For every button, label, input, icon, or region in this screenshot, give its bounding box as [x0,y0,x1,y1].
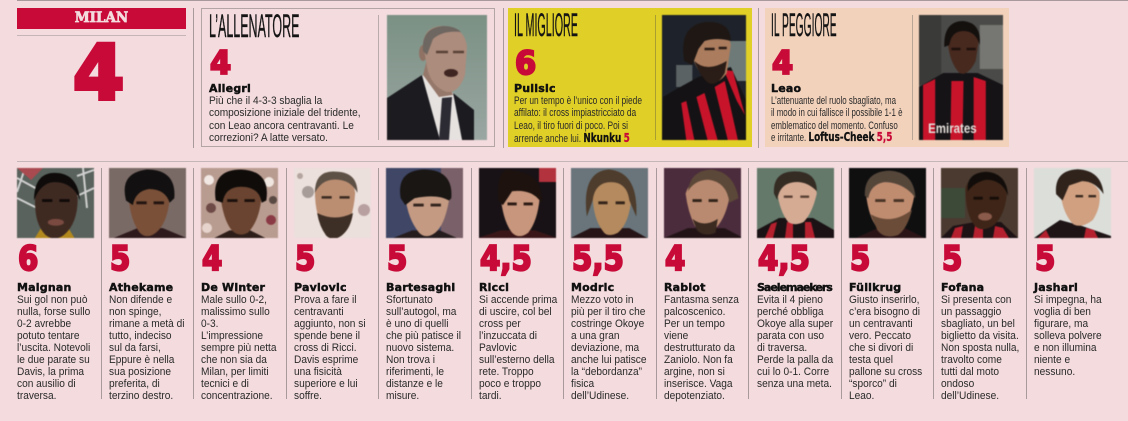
comment: soffre. [294,390,322,402]
comment: cross per [479,318,521,330]
comment: malissimo sullo [201,306,270,318]
comment: Fantasma senza [664,294,739,306]
comment: potuto tentare [17,330,80,342]
comment: sull’autogol, ma [386,306,456,318]
comment: Perde la palla da [757,354,833,366]
comment: vero. Peccato [849,330,911,342]
name: Maignan [17,281,72,294]
heading: L’ALLENATORE [209,8,299,44]
comment: depotenziato. [664,390,725,402]
worst player comment: il modo in cui fallisce il possibile 1-1 è [771,107,903,119]
coach comment: Più che il 4-3-3 sbaglia la [209,95,322,107]
comment: cross di Ricci. [294,342,357,354]
comment: costringe Okoye [571,318,644,330]
player card: Maignan [16,167,95,402]
rating: 5 [295,239,315,279]
comment: e non illumina [1034,342,1097,354]
worst player rating: 4 [772,44,793,82]
rating: 4,5 [480,239,532,279]
comment: voglia di ben [1034,306,1091,318]
comment: di uscire, col bel [479,306,552,318]
name: Ricci [479,281,509,294]
best player comment: affilato: il cross impiastricciato da [514,107,636,119]
photo: Bartesaghi [385,167,464,239]
comment: destrutturato da [664,342,735,354]
name: Bartesaghi [386,281,455,294]
comment: non spinge, [109,306,161,318]
player card: Jashari [1034,168,1111,400]
comment: dell’Udinese. [571,390,629,402]
comment: nessuno. [1034,366,1075,378]
comment: Non sposta nulla, [941,342,1019,354]
comment: perché obbliga [757,306,824,318]
coach comment: correzioni? A latte versato. [209,132,328,144]
photo: Füllkrug [848,167,927,239]
rating: 4,5 [758,239,810,279]
rating: 5 [1035,239,1055,279]
photo: Ricci [478,167,557,239]
best player name: Pulisic [514,82,556,95]
photo: Allegri [386,14,488,141]
comment [109,294,185,402]
player card: Athekame [108,167,187,402]
comment [757,294,834,390]
team name banner: MILAN [75,10,128,26]
coach comment: composizione iniziale del tridente, [209,107,361,119]
comment: inserisce. Vaga [664,378,733,390]
comment: palcoscenico. [664,306,725,318]
comment: anche lui patisce [571,354,647,366]
comment: Mezzo voto in [571,294,634,306]
comment: sull’esterno della [479,354,555,366]
comment: senza una meta. [757,378,832,390]
comment: Si presenta con [941,294,1011,306]
comment: L’impressione [201,330,263,342]
photo: De Winter [200,168,278,239]
comment: l’uscita. Notevoli [17,342,90,354]
rating: 5 [850,239,870,279]
rating: 5 [110,239,130,279]
heading: IL PEGGIORE [771,7,837,43]
heading: IL MIGLIORE [514,7,578,43]
comment [1034,294,1102,378]
comment: l’inzuccata di [479,330,537,342]
comment: deviazione, ma [571,342,639,354]
name: Athekame [109,281,173,294]
comment: un centravanti [849,318,913,330]
comment: che più patisce il [386,330,461,342]
comment: “sporco” di [849,378,897,390]
comment: distanze e le [386,378,443,390]
worst player comment: L’attenuante del ruolo sbagliato, ma [771,95,896,107]
comment: superiore e lui [294,378,358,390]
comment: un passaggio [941,306,1001,318]
comment: più per il tiro che [571,306,645,318]
comment: figurare, ma [1034,318,1088,330]
comment: argine, non si [664,366,725,378]
worst player comment: emblematico del momento. Confuso [771,120,898,132]
rating: 5,5 [572,239,624,279]
player card: De Winter [200,168,278,402]
name: Rabiot [664,281,706,294]
photo: Fofana [940,167,1019,239]
photo: Athekame [108,167,187,239]
comment: Davis esprime [294,354,358,366]
coach comment [209,95,361,144]
comment: tecnici e di [201,378,249,390]
comment: viene [664,330,688,342]
photo: Pulisic [661,14,747,141]
comment: poco e troppo [479,378,541,390]
comment: Davis, la prima [17,366,84,378]
photo: Jashari [1034,168,1111,238]
comment: Sfortunato [386,294,433,306]
comment: Zaniolo. Non fa [664,354,733,366]
comment: Non difende e [109,294,172,306]
player card: Pavlovic [294,170,371,402]
comment: solleva polvere [1034,330,1102,342]
photo: Leao [918,14,1004,141]
comment: aggiunto, non si [294,318,366,330]
comment [294,294,366,402]
comment: la “debordanza” [571,366,642,378]
name: Saelemaekers [757,281,832,294]
player card: Bartesaghi [385,167,464,402]
comment: niente e [1034,354,1070,366]
comment: Male sullo 0-2, [201,294,267,306]
comment: Per un tempo [664,318,725,330]
comment: che non sia da [201,354,267,366]
worst player comment: e irritante. Loftus-Cheek 5,5 [771,130,892,145]
comment [17,294,90,402]
name: Jashari [1034,281,1078,294]
comment: Si accende prima [479,294,557,306]
comment: c’era bisogno di [849,306,920,318]
player card: Rabiot [663,167,742,402]
team score: 4 [73,28,124,117]
comment: dell’Udinese. [941,390,999,402]
comment [201,294,277,402]
rating: 6 [18,239,38,279]
comment: terzino destro. [109,390,173,402]
player card: Ricci [478,167,558,402]
comment: Non trova i [386,354,435,366]
comment: nulla, forse sullo [17,306,90,318]
comment: testa quel [849,354,893,366]
comment: Eppure è nella [109,354,174,366]
player card: Modric [570,167,649,402]
photo: Saelemaekers [756,167,835,239]
comment: 0-2 avrebbe [17,318,71,330]
comment [941,294,1019,402]
comment: tardi. [479,390,502,402]
comment [849,294,922,402]
header: Milan team score [17,8,186,117]
name: De Winter [201,281,265,294]
player card: Füllkrug [848,167,927,402]
comment: Sui gol non può [17,294,87,306]
comment: Leao. [849,390,874,402]
team name banner [17,8,186,29]
comment: è uno di quelli [386,318,449,330]
comment: Milan, per limiti [201,366,269,378]
comment: una fisicità [294,366,342,378]
comment: Giusto inserirlo, [849,294,919,306]
comment: le due parate su [17,354,90,366]
comment: con ausilio di [17,378,76,390]
rating: 4 [202,239,222,279]
comment: Okoye alla super [757,318,833,330]
name: Fofana [941,281,984,294]
comment: 0-3. [201,318,218,330]
comment: ondoso [941,378,974,390]
coach comment: con Leao ancora centravanti. Le [209,120,354,132]
comment: nuovo sistema. [386,342,454,354]
comment: spende bene il [294,330,360,342]
photo: Leao: Emirates [928,120,977,136]
comment [479,294,558,402]
name: Modric [571,281,614,294]
rating: 5 [942,239,962,279]
photo: Rabiot [663,167,742,239]
worst player name: Leao [771,82,801,95]
panel: l'allenatore [201,8,495,147]
comment: riferimenti, le [386,366,444,378]
comment: concentrazione. [201,390,273,402]
comment: Si impegna, ha [1034,294,1102,306]
comment: preferita, di [109,378,160,390]
comment: che si divori di [849,342,913,354]
comment: travolto come [941,354,1002,366]
player card: Fofana [940,167,1019,402]
comment: cui lo 0-1. Corre [757,366,829,378]
comment: Pavlovic [479,342,517,354]
comment: centravanti [294,306,344,318]
comment: tutti dal moto [941,366,999,378]
comment: sul da farsi, [109,342,161,354]
comment: a una gran [571,330,619,342]
photo: Maignan [16,167,95,239]
comment: parata con uso [757,330,824,342]
comment: sbagliato, un bel [941,318,1015,330]
rating: 4 [665,239,685,279]
comment: tutto, indeciso [109,330,172,342]
comment: sempre più netta [201,342,277,354]
player card: Saelemaekers [756,167,835,390]
comment [664,294,739,402]
best player comment [514,95,642,145]
panel: il migliore [508,8,752,147]
photo: Modric [570,167,649,239]
best player comment: Per un tempo è l’unico con il piede [514,95,642,107]
comment: biglietto da visita. [941,330,1019,342]
comment [386,294,461,402]
comment: Evita il 4 pieno [757,294,823,306]
comment: misure. [386,390,419,402]
coach rating: 4 [210,44,231,82]
best player comment: arrende anche lui. Nkunku 5 [514,131,630,145]
comment: rimane a metà di [109,318,185,330]
name: Füllkrug [849,281,901,294]
comment: fisica [571,378,594,390]
name: Pavlovic [294,281,347,294]
comment: Prova a fare il [294,294,357,306]
rating: 5 [387,239,407,279]
comment [571,294,647,402]
comment: di traversa. [757,342,807,354]
comment: pallone su cross [849,366,922,378]
panel: il peggiore [765,8,1009,147]
best player comment: Leao, il tiro fuori di poco. Poi si [514,120,628,132]
photo: Pavlovic [296,170,371,239]
comment: sua posizione [109,366,171,378]
best player rating: 6 [515,44,536,82]
comment: rete. Troppo [479,366,534,378]
coach name: Allegri [209,82,251,95]
worst player comment [771,95,903,145]
comment: traversa. [17,390,56,402]
